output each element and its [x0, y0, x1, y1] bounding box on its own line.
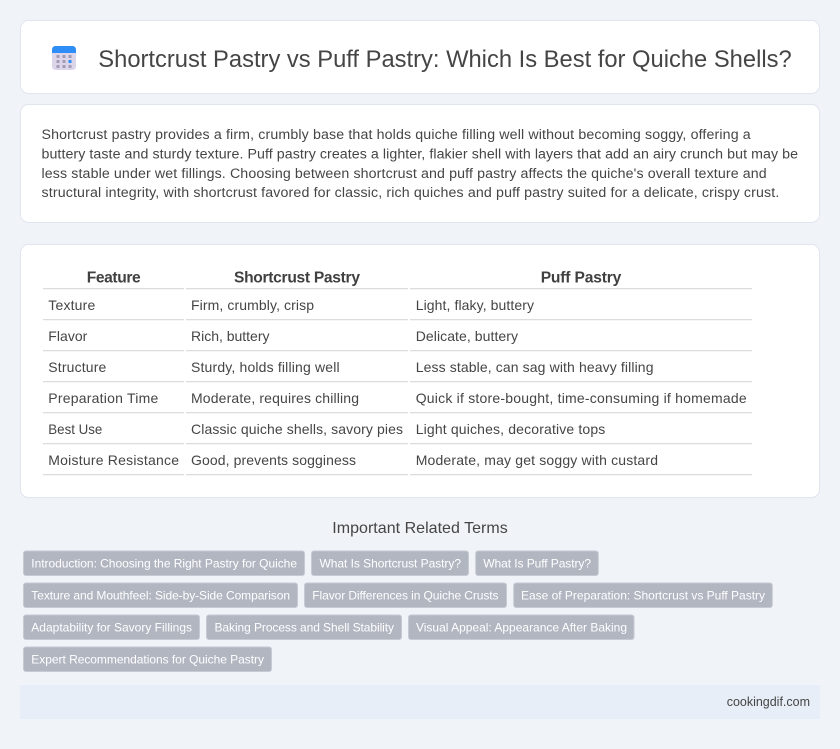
footer — [20, 685, 820, 719]
table row: moisture resistance — [48, 452, 658, 468]
tag: Texture and Mouthfeel: Side-by-Side Comparison — [31, 588, 290, 602]
table row: preparation time — [48, 390, 747, 406]
panel: title card — [20, 20, 820, 94]
heading: important related terms: Important Related Terms — [332, 520, 508, 537]
table row: best use: Light quiches, decorative tops — [416, 421, 605, 437]
tag: Visual Appeal: Appearance After Baking — [416, 620, 627, 634]
table row: preparation time: Quick if store-bought, time-consuming if homemade — [416, 390, 747, 406]
table row: structure — [48, 359, 654, 375]
tag — [24, 551, 304, 576]
panel: summary paragraph — [20, 104, 820, 222]
table row: preparation time: Moderate, requires chilling — [191, 390, 359, 406]
text block: summary: structural integrity, with shortcrust favored for classic, rich quiches and puff pastry suited for a delicate, crispy crust. — [42, 185, 779, 201]
tag list — [24, 551, 772, 672]
tag — [304, 583, 506, 608]
panel: comparison table — [20, 244, 820, 498]
tag — [24, 647, 272, 672]
tag — [476, 551, 598, 576]
table row: best use: Best Use — [48, 421, 102, 437]
table row: flavor: Rich, buttery — [191, 328, 270, 344]
tag — [24, 583, 298, 608]
tag: Ease of Preparation: Shortcrust vs Puff Pastry — [521, 588, 765, 602]
table row: best use: Classic quiche shells, savory pies — [191, 421, 403, 437]
table row: flavor: Flavor — [48, 328, 88, 344]
tag — [206, 615, 402, 640]
tag: Baking Process and Shell Stability — [214, 620, 394, 634]
icon: calendar — [52, 46, 76, 70]
tag — [312, 551, 468, 576]
table row: structure: Less stable, can sag with heavy filling — [416, 359, 654, 375]
table row: structure: Structure — [48, 359, 107, 375]
text block: summary — [42, 127, 798, 201]
table row: flavor — [48, 328, 518, 344]
tag — [514, 583, 772, 608]
title: Shortcrust Pastry vs Puff Pastry: Which Is Best for Quiche Shells? — [98, 46, 792, 73]
table row: structure: Sturdy, holds filling well — [191, 359, 340, 375]
tag — [24, 615, 200, 640]
tag: Introduction: Choosing the Right Pastry for Quiche — [31, 556, 297, 570]
table row: texture: Texture — [48, 297, 96, 313]
table header: Feature — [87, 270, 141, 287]
table row: moisture resistance: Moderate, may get soggy with custard — [416, 452, 658, 468]
footer: cookingdif.com — [727, 695, 810, 709]
table row: texture — [48, 297, 534, 313]
table header: Puff Pastry — [541, 270, 622, 287]
table row: flavor: Delicate, buttery — [416, 328, 518, 344]
text block: summary: less stable under wet fillings. Choosing between shortcrust and puff pastry affects the quiche's overall texture and — [42, 166, 767, 182]
tag: What Is Shortcrust Pastry? — [320, 556, 461, 570]
tag: What Is Puff Pastry? — [483, 556, 591, 570]
table row: texture: Light, flaky, buttery — [416, 297, 534, 313]
table row: preparation time: Preparation Time — [48, 390, 159, 406]
table header — [87, 270, 622, 287]
table row: best use — [48, 421, 605, 437]
text block: summary: Shortcrust pastry provides a firm, crumbly base that holds quiche filling well without becoming soggy, offering a — [42, 127, 751, 143]
tag — [408, 615, 634, 640]
table row: texture: Firm, crumbly, crisp — [191, 297, 314, 313]
tag: Expert Recommendations for Quiche Pastry — [31, 652, 264, 666]
table header: Shortcrust Pastry — [234, 270, 360, 287]
tag: Flavor Differences in Quiche Crusts — [312, 588, 498, 602]
text block: summary: buttery taste and sturdy texture. Puff pastry creates a lighter, flakier shell with layers that add an airy crunch but may be — [42, 146, 798, 162]
table row: moisture resistance: Good, prevents sogginess — [191, 452, 356, 468]
tag: Adaptability for Savory Fillings — [31, 620, 192, 634]
table row: moisture resistance: Moisture Resistance — [48, 452, 179, 468]
